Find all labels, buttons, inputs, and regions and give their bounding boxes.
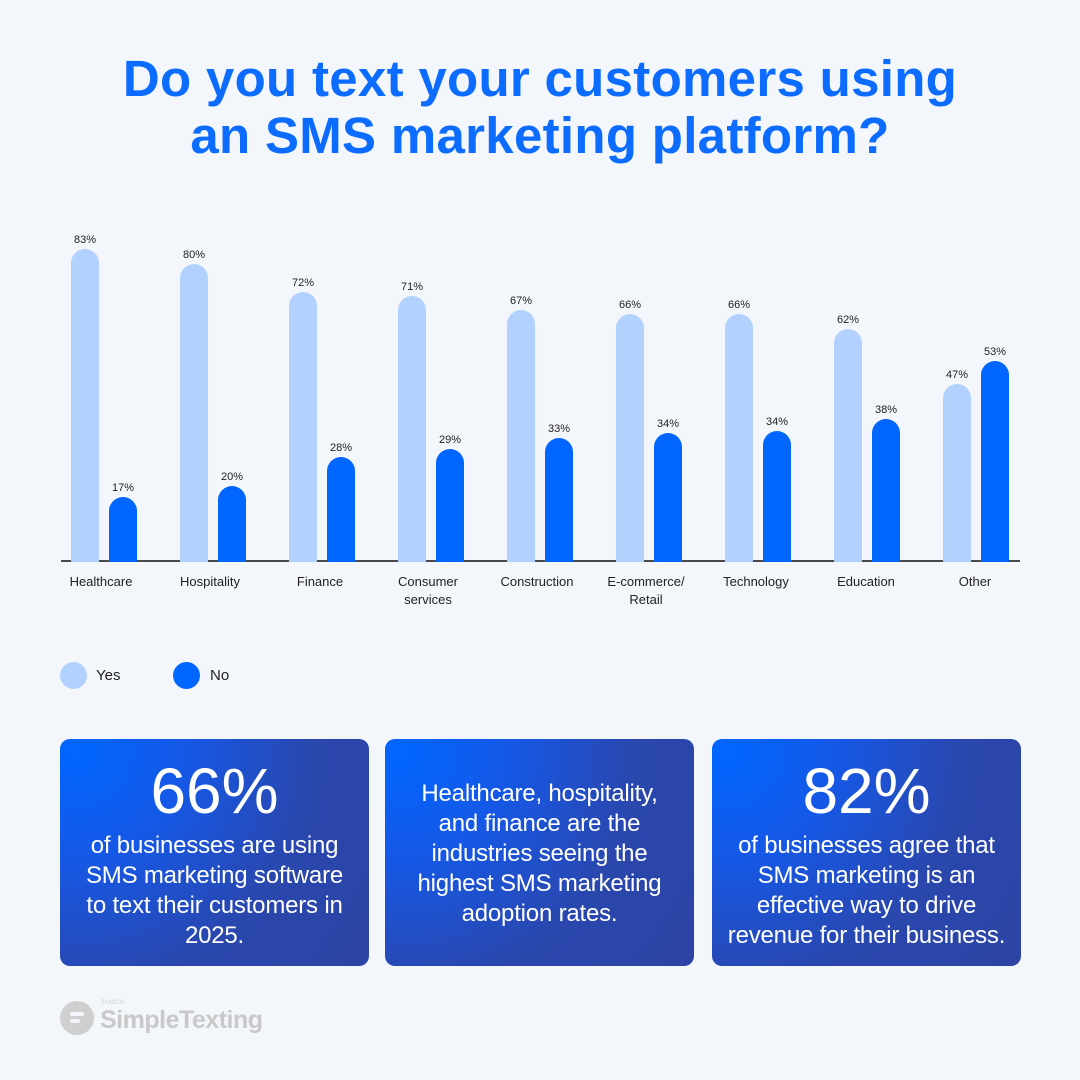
Hospitality bars: 80% (183, 249, 205, 261)
Consumer services bars: 29% (439, 434, 461, 446)
Other bars: 47% (946, 369, 968, 381)
card: 82%: 82% (802, 755, 931, 827)
card: 82%: of businesses agree that (738, 832, 995, 859)
card: industries: Healthcare, hospitality, (421, 780, 658, 807)
bar chart (61, 234, 1020, 562)
card: 66%: of businesses are using (91, 832, 338, 859)
E-commerce bars: 34% (657, 418, 679, 430)
category labels: Education (837, 574, 895, 589)
Healthcare bars: 83% (74, 234, 96, 246)
card: industries: industries seeing the (432, 840, 647, 867)
E-commerce bars (616, 299, 682, 575)
category labels: E-commerce/ (607, 574, 685, 589)
logo: SimpleTexting (100, 1006, 263, 1034)
Education bars (834, 314, 900, 575)
Finance bars: 72% (292, 277, 314, 289)
card: 66%: 2025. (185, 922, 244, 949)
legend (60, 662, 229, 689)
card: industries: and finance are the (439, 810, 640, 837)
card: industries (385, 739, 694, 966)
category labels: Other (959, 574, 991, 589)
card: 66% (60, 739, 369, 966)
card: 82%: revenue for their business. (728, 922, 1005, 949)
logo: SINCH (101, 1000, 125, 1006)
category labels (70, 574, 991, 607)
Healthcare bars: 17% (112, 482, 134, 494)
Technology bars (725, 299, 791, 575)
Consumer services bars: 71% (401, 281, 423, 293)
Technology bars: 34% (766, 416, 788, 428)
title (123, 50, 957, 164)
Construction bars (507, 295, 573, 575)
card: 82%: effective way to drive (757, 892, 976, 919)
Construction bars: 33% (548, 423, 570, 435)
category labels: Technology (723, 574, 789, 589)
card: 82%: SMS marketing is an (758, 862, 975, 889)
card: industries: adoption rates. (462, 900, 617, 927)
card: 66%: to text their customers in (86, 892, 343, 919)
Hospitality bars: 20% (221, 471, 243, 483)
card: 66%: 66% (150, 755, 279, 827)
logo (60, 1000, 263, 1035)
category labels: services (404, 592, 452, 607)
category labels: Finance (297, 574, 343, 589)
card: 82% (712, 739, 1021, 966)
legend: No (210, 667, 229, 684)
E-commerce bars: 66% (619, 299, 641, 311)
Healthcare bars (71, 234, 137, 575)
Education bars: 38% (875, 404, 897, 416)
Finance bars: 28% (330, 442, 352, 454)
title: Do you text your customers using (123, 50, 957, 107)
category labels: Construction (500, 574, 573, 589)
Finance bars (289, 277, 355, 575)
Other bars (943, 346, 1009, 575)
Technology bars: 66% (728, 299, 750, 311)
Consumer services bars (398, 281, 464, 575)
card: 66%: SMS marketing software (86, 862, 343, 889)
legend: Yes (96, 667, 120, 684)
category labels: Hospitality (180, 574, 240, 589)
Hospitality bars (180, 249, 246, 575)
category labels: Healthcare (70, 574, 132, 589)
category labels: Retail (629, 592, 663, 607)
card: industries: highest SMS marketing (418, 870, 661, 897)
category labels: Consumer (398, 574, 458, 589)
Other bars: 53% (984, 346, 1006, 358)
Construction bars: 67% (510, 295, 532, 307)
Education bars: 62% (837, 314, 859, 326)
title: an SMS marketing platform? (190, 107, 890, 164)
